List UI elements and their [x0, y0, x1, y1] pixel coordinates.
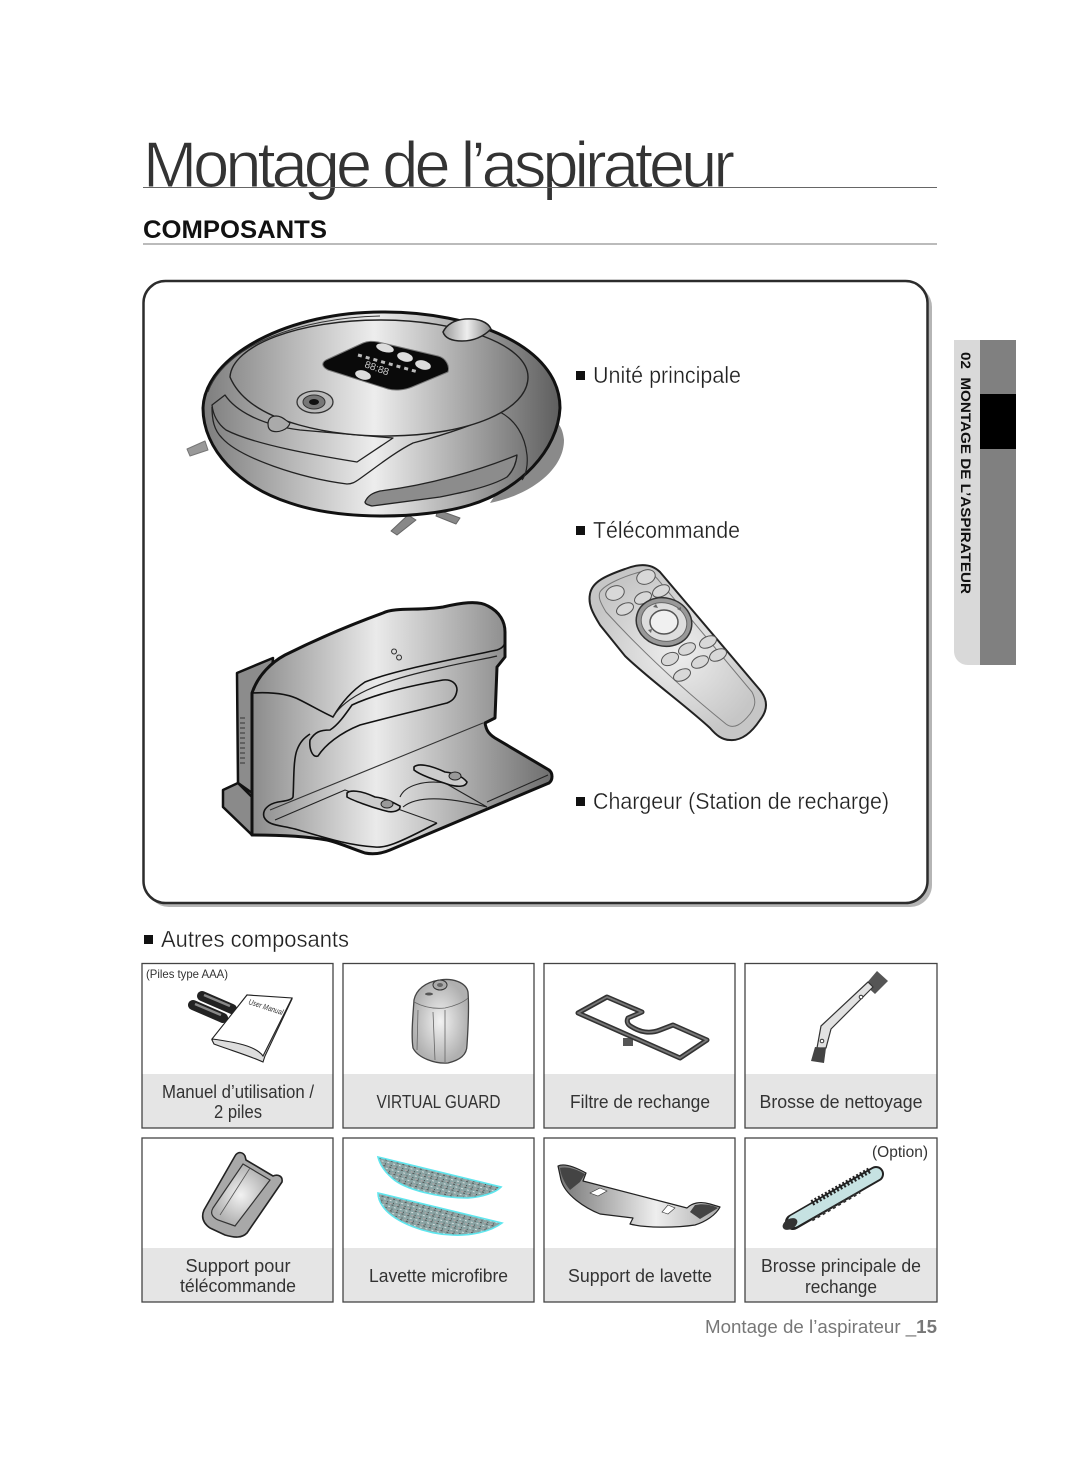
icon: charging station	[223, 603, 552, 854]
page footer: Montage de l’aspirateur _ 15	[705, 1317, 937, 1338]
label: VIRTUAL GUARD	[376, 1092, 500, 1112]
label	[162, 1082, 314, 1122]
label: télécommande	[180, 1276, 296, 1296]
icon: cloth holder	[558, 1165, 720, 1227]
charging pins	[347, 765, 467, 812]
panel: main components	[144, 281, 932, 907]
side tab text: 02 MONTAGE DE L’ASPIRATEUR	[958, 352, 973, 594]
card: main replacement brush	[745, 1138, 937, 1302]
card: replacement filter	[544, 964, 735, 1128]
label	[180, 1256, 296, 1296]
label: charger: Chargeur (Station de recharge)	[593, 788, 889, 814]
label: Brosse principale de	[761, 1256, 921, 1276]
icon: cleaning brush	[811, 971, 888, 1063]
control panel: 88:88	[363, 359, 391, 379]
label: Support pour	[186, 1256, 290, 1276]
label: 2 piles	[214, 1102, 262, 1122]
sensor knob	[268, 416, 290, 432]
caption: option: (Option)	[872, 1144, 928, 1161]
card: manual and batteries	[142, 964, 333, 1128]
label: Support de lavette	[568, 1266, 712, 1286]
label: rechange	[805, 1277, 877, 1297]
card: virtual guard	[343, 964, 534, 1128]
caption: battery type: (Piles type AAA)	[146, 967, 228, 981]
icon: user manual	[212, 995, 292, 1062]
icon: virtual guard	[412, 980, 468, 1063]
side tab	[954, 340, 1016, 665]
label: Filtre de rechange	[570, 1092, 710, 1112]
icon: microfibre cloths	[378, 1157, 502, 1235]
top button	[443, 319, 491, 341]
label: Manuel d’utilisation /	[162, 1082, 314, 1102]
icon: main brush	[781, 1170, 876, 1232]
card: microfibre cloths	[343, 1138, 534, 1302]
icon: remote holder	[203, 1153, 282, 1237]
control panel	[323, 341, 449, 390]
page title: Montage de l’aspirateur	[143, 128, 735, 201]
label: main unit: Unité principale	[593, 362, 741, 388]
camera lens	[297, 391, 333, 413]
icon: remote control	[589, 565, 766, 740]
label: Lavette microfibre	[369, 1266, 508, 1286]
label: remote control: Télécommande	[593, 517, 740, 543]
icon: user manual: User Manual	[247, 997, 285, 1017]
card: cloth holder	[544, 1138, 735, 1302]
icon: batteries	[193, 995, 232, 1018]
section heading: COMPOSANTS	[143, 216, 327, 244]
icon: robot vacuum	[187, 312, 564, 535]
heading: other components: Autres composants	[161, 926, 349, 952]
label: Brosse de nettoyage	[760, 1092, 922, 1112]
card: cleaning brush	[745, 964, 937, 1128]
icon: filter	[578, 997, 707, 1058]
label	[761, 1256, 921, 1297]
card: remote holder	[142, 1138, 333, 1302]
